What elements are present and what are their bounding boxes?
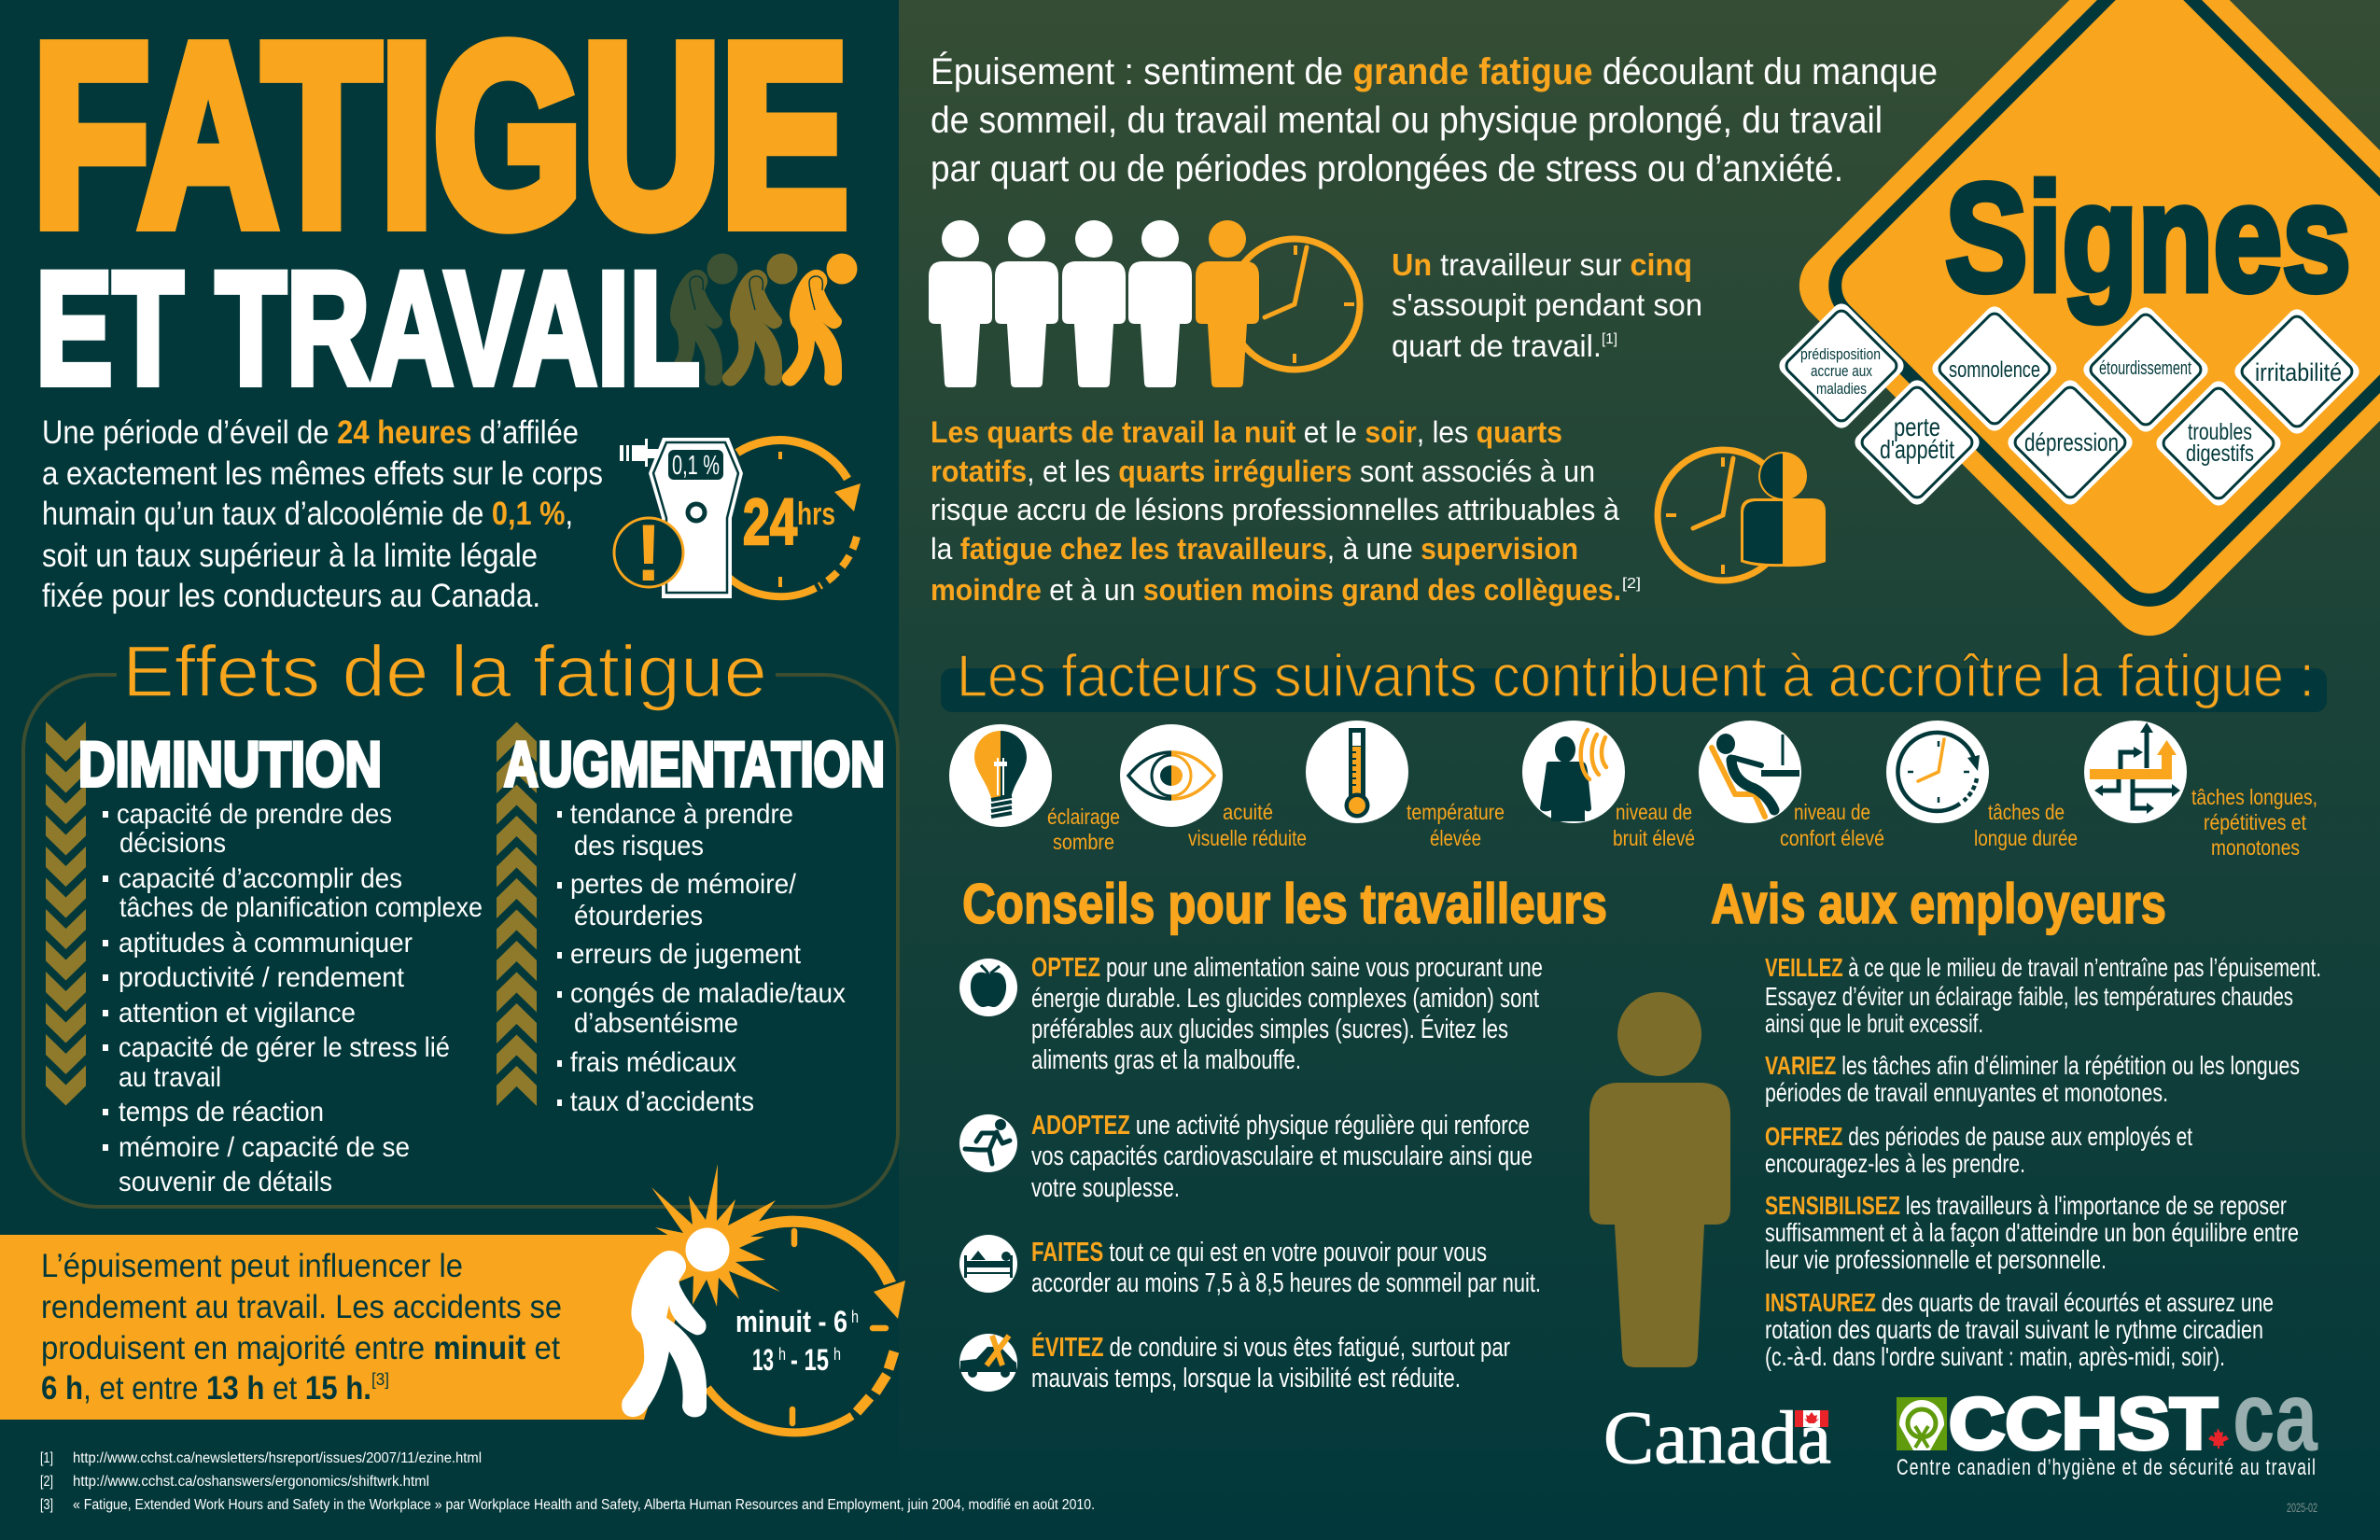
icon: comfort bbox=[1699, 721, 1801, 823]
list: increase items: taux d’accidents bbox=[570, 1086, 754, 1117]
label: comfort level: confort élevé bbox=[1780, 826, 1884, 850]
list: decrease items: aptitudes à communiquer bbox=[119, 928, 413, 959]
list: increase items: des risques bbox=[574, 831, 704, 861]
sign: drowsiness bbox=[1928, 302, 2061, 435]
panel: contributing factors heading: Les facteurs suivants contribuent à accroître la fatigue : bbox=[957, 642, 2315, 709]
icon: noise bbox=[1522, 721, 1625, 823]
footnotes bbox=[40, 1450, 1095, 1513]
list: increase items: d’absentéisme bbox=[574, 1008, 738, 1039]
label: long repetitive tasks: tâches longues, bbox=[2191, 785, 2317, 809]
text: avoid driving when tired: mauvais temps, lorsque la visibilité est réduite. bbox=[1031, 1364, 1461, 1393]
heading: tips for workers: Conseils pour les travailleurs bbox=[962, 873, 1607, 935]
text: shift work risks: Les quarts de travail la nuit et le soir, les quarts bbox=[931, 415, 1562, 449]
text: employer advice: ainsi que le bruit excessif. bbox=[1765, 1009, 1983, 1038]
sign: depression bbox=[2004, 376, 2136, 509]
list: increase items bbox=[557, 799, 846, 1117]
text: opt for healthy food: préférables aux glucides simples (sucres). Évitez les bbox=[1031, 1014, 1508, 1044]
text: adopt physical activity: votre souplesse. bbox=[1031, 1173, 1180, 1203]
icon: five people bbox=[929, 220, 1259, 387]
chevrons: decrease bbox=[46, 721, 86, 1105]
heading: effects of fatigue: Effets de la fatigue bbox=[122, 630, 767, 712]
heading: DIMINUTION: DIMINUTION bbox=[78, 729, 382, 800]
label: reduced visual acuity bbox=[1188, 800, 1307, 850]
icon: car with X bbox=[959, 1334, 1017, 1392]
icon: 24 hour clock bbox=[728, 441, 861, 596]
label: reduced visual acuity: acuité bbox=[1223, 800, 1273, 824]
icon: thermometer bbox=[1306, 721, 1408, 823]
walking figures icon bbox=[663, 254, 857, 386]
intro paragraph: 24 hours awake: Une période d’éveil de 24 heures d’affilée bbox=[42, 414, 579, 451]
text: shift work risks: rotatifs, et les quarts irréguliers sont associés à un bbox=[931, 455, 1595, 488]
icon: large person bbox=[1589, 992, 1730, 1367]
icon: clock with hours of accidents: 13 bbox=[752, 1343, 774, 1377]
footnotes: http://www.cchst.ca/newsletters/hsreport/issues/2007/11/ezine.html bbox=[73, 1450, 482, 1466]
text: adopt physical activity: ADOPTEZ une activité physique régulière qui renforce bbox=[1031, 1111, 1530, 1141]
footnotes: [2] bbox=[40, 1474, 53, 1490]
label: long duration tasks: longue durée bbox=[1974, 826, 2078, 850]
sign: drowsiness: somnolence bbox=[1949, 357, 2040, 383]
list: increase items: erreurs de jugement bbox=[570, 939, 802, 970]
list: decrease items: souvenir de détails bbox=[119, 1167, 332, 1197]
icon: burst of pain bbox=[651, 1164, 780, 1307]
icon: clock with hours of accidents: h bbox=[833, 1345, 841, 1364]
list: increase items: pertes de mémoire/ bbox=[570, 869, 797, 900]
list: decrease items: temps de réaction bbox=[119, 1097, 324, 1127]
label: reduced visual acuity: visuelle réduite bbox=[1188, 826, 1307, 850]
list: decrease items: tâches de planification complexe bbox=[119, 892, 483, 923]
icon: clock and half-shaded worker bbox=[1658, 450, 1826, 581]
sign: predisposition: accrue aux bbox=[1811, 362, 1872, 380]
list: decrease items: décisions bbox=[119, 828, 226, 859]
sign: predisposition: prédisposition bbox=[1800, 345, 1881, 363]
title: FATIGUE: FATIGUE bbox=[33, 0, 848, 279]
icon: exclamation alert bbox=[614, 509, 683, 598]
logo: CCHST.ca: CCHST bbox=[1949, 1382, 2218, 1464]
text: one worker in five bbox=[1392, 247, 1702, 363]
text: avoid driving when tired bbox=[1031, 1331, 1510, 1393]
icon: apple bbox=[959, 959, 1017, 1016]
label: high noise level: niveau de bbox=[1616, 800, 1692, 824]
label: dim lighting: sombre bbox=[1053, 830, 1114, 854]
icon: runner bbox=[959, 1114, 1017, 1172]
icon: 24 hour clock: 24 bbox=[743, 485, 797, 558]
definition of exhaustion: par quart ou de périodes prolongées de stress ou d’anxiété. bbox=[931, 148, 1843, 189]
label: long repetitive tasks: monotones bbox=[2211, 835, 2300, 860]
label: high temperature: température bbox=[1407, 800, 1505, 824]
icon: dim lighting bbox=[949, 724, 1052, 827]
label: long duration tasks bbox=[1974, 800, 2078, 850]
text: employer advice: leur vie professionnelle et personnelle. bbox=[1765, 1245, 2107, 1274]
footnotes: [1] bbox=[40, 1450, 53, 1466]
icon: clock with hours of accidents: - 15 bbox=[791, 1343, 829, 1377]
list: increase items: congés de maladie/taux bbox=[570, 978, 846, 1009]
definition of exhaustion bbox=[931, 50, 1938, 189]
list: decrease items: capacité de gérer le stress lié bbox=[119, 1032, 450, 1063]
text: shift work risks: la fatigue chez les travailleurs, à une supervision bbox=[931, 532, 1578, 566]
intro paragraph: 24 hours awake: soit un taux supérieur à la limite légale bbox=[42, 538, 538, 574]
text: opt for healthy food: OPTEZ pour une alimentation saine vous procurant une bbox=[1031, 953, 1543, 983]
list: decrease items bbox=[103, 799, 483, 1197]
banner: accidents timing: 6 h, et entre 13 h et 15 h. bbox=[41, 1370, 371, 1407]
sign: depression: dépression bbox=[2024, 428, 2119, 456]
logo: Canada wordmark: Canada bbox=[1603, 1397, 1831, 1479]
logo: CCHST.ca: ca bbox=[2233, 1362, 2318, 1472]
text: one worker in five: quart de travail. bbox=[1392, 329, 1602, 363]
icon: breathalyzer: 0,1 % bbox=[672, 451, 720, 481]
text: one worker in five: [1] bbox=[1602, 331, 1617, 347]
icon: breathalyzer bbox=[620, 438, 743, 598]
text: opt for healthy food: énergie durable. Les glucides complexes (amidon) sont bbox=[1031, 984, 1539, 1014]
title: ET TRAVAIL: ET TRAVAIL bbox=[35, 239, 700, 418]
footnotes: http://www.cchst.ca/oshanswers/ergonomics/shiftwrk.html bbox=[73, 1474, 429, 1490]
sign: digestive troubles: troubles bbox=[2188, 419, 2252, 445]
label: dim lighting: éclairage bbox=[1047, 805, 1120, 829]
sign: loss of appetite bbox=[1851, 376, 1983, 509]
sign: predisposition bbox=[1775, 300, 1908, 432]
list: decrease items: capacité de prendre des bbox=[117, 799, 392, 830]
banner: accidents timing: [3] bbox=[371, 1370, 389, 1389]
sign: digestive troubles: digestifs bbox=[2186, 441, 2254, 467]
label: long repetitive tasks bbox=[2191, 785, 2317, 860]
list: decrease items: au travail bbox=[119, 1062, 221, 1093]
text: employer advice: périodes de travail ennuyantes et monotones. bbox=[1765, 1078, 2168, 1107]
intro paragraph: 24 hours awake bbox=[42, 414, 603, 614]
edition date: 2025-02 bbox=[2287, 1500, 2317, 1515]
icon: clock one in five bbox=[1229, 239, 1360, 370]
text: get enough sleep: accorder au moins 7,5 à 8,5 heures de sommeil par nuit. bbox=[1031, 1268, 1541, 1298]
icon: clock with hours of accidents: h bbox=[778, 1345, 786, 1364]
list: decrease items: productivité / rendement bbox=[119, 962, 405, 993]
text: one worker in five: Un travailleur sur cinq bbox=[1392, 247, 1692, 282]
text: get enough sleep bbox=[1031, 1238, 1541, 1298]
text: get enough sleep: FAITES tout ce qui est en votre pouvoir pour vous bbox=[1031, 1238, 1487, 1267]
sign: irritability: irritabilité bbox=[2255, 358, 2342, 386]
icon: reduced visual acuity bbox=[1120, 724, 1223, 827]
text: opt for healthy food: aliments gras et la malbouffe. bbox=[1031, 1045, 1301, 1075]
label: long repetitive tasks: répétitives et bbox=[2204, 810, 2307, 834]
sign: loss of appetite: perte bbox=[1894, 413, 1940, 441]
label: comfort level bbox=[1780, 800, 1884, 850]
label: high temperature bbox=[1407, 800, 1505, 850]
banner: accidents timing: rendement au travail. Les accidents se bbox=[41, 1289, 562, 1325]
text: shift work risks: risque accru de lésions professionnelles attribuables à bbox=[931, 493, 1619, 526]
panel: effects of fatigue bbox=[23, 630, 898, 1207]
intro paragraph: 24 hours awake: humain qu’un taux d’alcoolémie de 0,1 %, bbox=[42, 496, 573, 532]
text: opt for healthy food bbox=[1031, 953, 1543, 1075]
label: long duration tasks: tâches de bbox=[1988, 800, 2065, 824]
icon: exclamation alert: ! bbox=[636, 509, 662, 598]
definition of exhaustion: de sommeil, du travail mental ou physique prolongé, du travail bbox=[931, 100, 1883, 141]
text: one worker in five: s'assoupit pendant son bbox=[1392, 287, 1702, 322]
text: employer advice: (c.-à-d. dans l'ordre suivant : matin, après-midi, soir). bbox=[1765, 1342, 2225, 1371]
intro paragraph: 24 hours awake: fixée pour les conducteurs au Canada. bbox=[42, 578, 540, 614]
icon: 24 hour clock: hrs bbox=[797, 497, 835, 532]
text: adopt physical activity bbox=[1031, 1111, 1533, 1203]
chevrons: increase bbox=[497, 722, 537, 1106]
heading: notice to employers: Avis aux employeurs bbox=[1711, 873, 2166, 935]
icon: long duration tasks bbox=[1886, 721, 1989, 823]
logo: CCHST.ca bbox=[1897, 1362, 2318, 1480]
banner: accidents timing: L’épuisement peut influencer le bbox=[41, 1248, 463, 1284]
icon: clock with hours of accidents: minuit - 6 bbox=[735, 1305, 847, 1338]
label: comfort level: niveau de bbox=[1794, 800, 1870, 824]
sign: digestive troubles bbox=[2152, 377, 2285, 510]
text: adopt physical activity: vos capacités cardiovasculaire et musculaire ainsi que bbox=[1031, 1141, 1533, 1171]
text: shift work risks bbox=[931, 415, 1641, 607]
label: high noise level bbox=[1613, 800, 1695, 850]
list: increase items: tendance à prendre bbox=[570, 799, 793, 830]
label: high temperature: élevée bbox=[1430, 826, 1481, 850]
sign: loss of appetite: d'appétit bbox=[1880, 435, 1954, 464]
icon: clock with hours of accidents: h bbox=[851, 1308, 859, 1326]
label: dim lighting bbox=[1047, 805, 1120, 854]
sign: predisposition: maladies bbox=[1816, 380, 1867, 398]
label: high noise level: bruit élevé bbox=[1613, 826, 1695, 850]
icon: repetitive tasks bbox=[2084, 721, 2187, 823]
banner: accidents timing: produisent en majorité entre minuit et bbox=[41, 1330, 560, 1366]
list: increase items: étourderies bbox=[574, 901, 703, 931]
text: employer advice: encouragez-les à les prendre. bbox=[1765, 1149, 2025, 1178]
text: shift work risks: moindre et à un soutien moins grand des collègues. bbox=[931, 573, 1621, 607]
intro paragraph: 24 hours awake: a exactement les mêmes effets sur le corps bbox=[42, 455, 603, 492]
icon: bed bbox=[959, 1235, 1017, 1293]
footnotes: « Fatigue, Extended Work Hours and Safety in the Workplace » par Workplace Health and Safety, Alberta Human Resources and Employment, juin 2004, modifié en août 2010. bbox=[73, 1497, 1095, 1513]
icon: clock with hours of accidents bbox=[707, 1216, 905, 1433]
list: increase items: frais médicaux bbox=[570, 1047, 736, 1078]
sign: dizziness: étourdissement bbox=[2099, 358, 2191, 379]
sign: dizziness bbox=[2079, 303, 2212, 436]
text: employer advice: OFFREZ des périodes de pause aux employés et bbox=[1765, 1122, 2192, 1151]
text: avoid driving when tired: ÉVITEZ de conduire si vous êtes fatigué, surtout par bbox=[1031, 1331, 1510, 1363]
list: decrease items: attention et vigilance bbox=[119, 998, 356, 1029]
footnotes: [3] bbox=[40, 1497, 53, 1513]
list: decrease items: capacité d’accomplir des bbox=[119, 863, 402, 894]
text: shift work risks: [2] bbox=[1622, 576, 1641, 592]
heading: AUGMENTATION: AUGMENTATION bbox=[504, 729, 885, 800]
banner: accidents timing bbox=[0, 1235, 679, 1420]
text: employer advice bbox=[1765, 953, 2321, 1371]
panel: signs road sign bbox=[1775, 0, 2380, 651]
list: decrease items: mémoire / capacité de se bbox=[119, 1132, 410, 1163]
sign: irritability bbox=[2231, 305, 2363, 438]
definition of exhaustion: Épuisement : sentiment de grande fatigue découlant du manque bbox=[931, 50, 1938, 92]
icon: tired person bbox=[622, 1228, 730, 1417]
